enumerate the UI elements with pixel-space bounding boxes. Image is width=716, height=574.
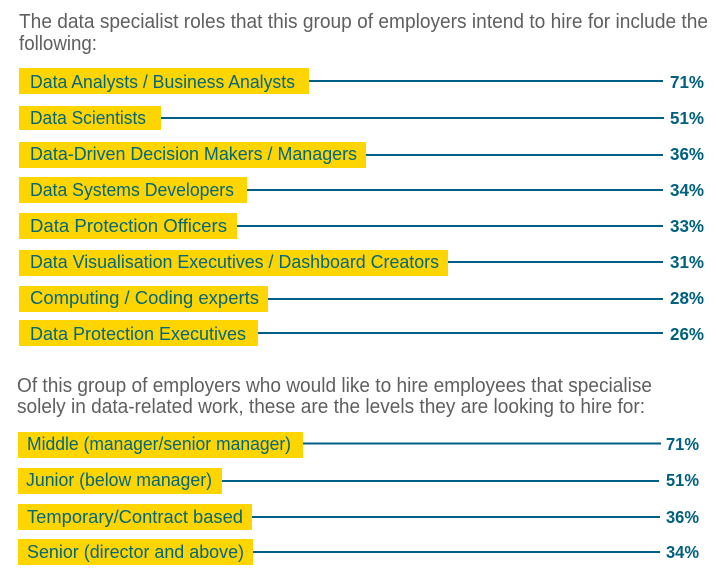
row: Data Systems Developers 34%: Data Systems Developers bbox=[30, 179, 234, 200]
row: Middle 71%: 71% bbox=[666, 434, 699, 454]
row: Data Protection Executives 26%: 26% bbox=[670, 324, 704, 344]
row: Data Protection Executives 26%: Data Protection Executives bbox=[30, 323, 246, 344]
intro text: data specialist roles bbox=[19, 11, 708, 55]
row: Junior 51% bbox=[18, 468, 699, 494]
row: Data Scientists 51%: 51% bbox=[670, 108, 704, 128]
row: Data Scientists 51% bbox=[19, 106, 704, 130]
row: Senior 34% bbox=[18, 539, 699, 565]
row: Data-Driven Decision Makers / Managers 36% bbox=[19, 142, 704, 168]
row: Temporary/Contract based 36%: 36% bbox=[666, 507, 699, 527]
row: Data Protection Officers 33%: Data Protection Officers bbox=[30, 215, 227, 236]
chart: data specialist roles bbox=[19, 68, 704, 346]
row: Senior 34%: 34% bbox=[666, 542, 699, 562]
row: Data Systems Developers 34%: 34% bbox=[670, 180, 704, 200]
row: Data Scientists 51%: Data Scientists bbox=[30, 107, 146, 128]
row: Middle 71%: Middle (manager/senior manager) bbox=[27, 433, 291, 454]
row: Data Analysts / Business Analysts 71%: 71% bbox=[670, 72, 704, 92]
row: Data Systems Developers 34% bbox=[19, 177, 704, 203]
row: Computing / Coding experts 28%: Computing / Coding experts bbox=[30, 287, 259, 308]
chart: hiring levels bbox=[18, 432, 699, 565]
intro text: data specialist roles: following: bbox=[19, 33, 97, 55]
row: Temporary/Contract based 36%: Temporary/Contract based bbox=[27, 506, 243, 527]
row: Senior 34%: Senior (director and above) bbox=[27, 541, 244, 562]
row: Data Protection Officers 33% bbox=[19, 213, 704, 239]
row: Data Visualisation Executives / Dashboard Creators 31% bbox=[19, 250, 704, 276]
intro text: hiring levels bbox=[17, 375, 652, 418]
row: Data Analysts / Business Analysts 71% bbox=[19, 68, 704, 94]
row: Computing / Coding experts 28%: 28% bbox=[670, 288, 704, 308]
row: Middle 71% bbox=[18, 432, 699, 458]
intro text: hiring levels: Of this group of employers who would like to hire employees that specialise bbox=[17, 375, 652, 397]
row: Computing / Coding experts 28% bbox=[19, 286, 704, 312]
row: Data-Driven Decision Makers / Managers 36%: 36% bbox=[670, 144, 704, 164]
row: Data Protection Officers 33%: 33% bbox=[670, 216, 704, 236]
row: Temporary/Contract based 36% bbox=[18, 504, 699, 530]
intro text: hiring levels: solely in data-related work, these are the levels they are looking to hire for: bbox=[17, 396, 645, 418]
row: Data-Driven Decision Makers / Managers 36%: Data-Driven Decision Makers / Managers bbox=[30, 143, 357, 164]
row: Data Protection Executives 26% bbox=[19, 320, 704, 346]
row: Data Visualisation Executives / Dashboard Creators 31%: 31% bbox=[670, 252, 704, 272]
row: Junior 51%: Junior (below manager) bbox=[26, 469, 212, 490]
row: Data Visualisation Executives / Dashboard Creators 31%: Data Visualisation Executives / Dashboard Creators bbox=[30, 251, 439, 272]
row: Junior 51%: 51% bbox=[666, 470, 699, 490]
row: Data Analysts / Business Analysts 71%: Data Analysts / Business Analysts bbox=[30, 71, 295, 92]
